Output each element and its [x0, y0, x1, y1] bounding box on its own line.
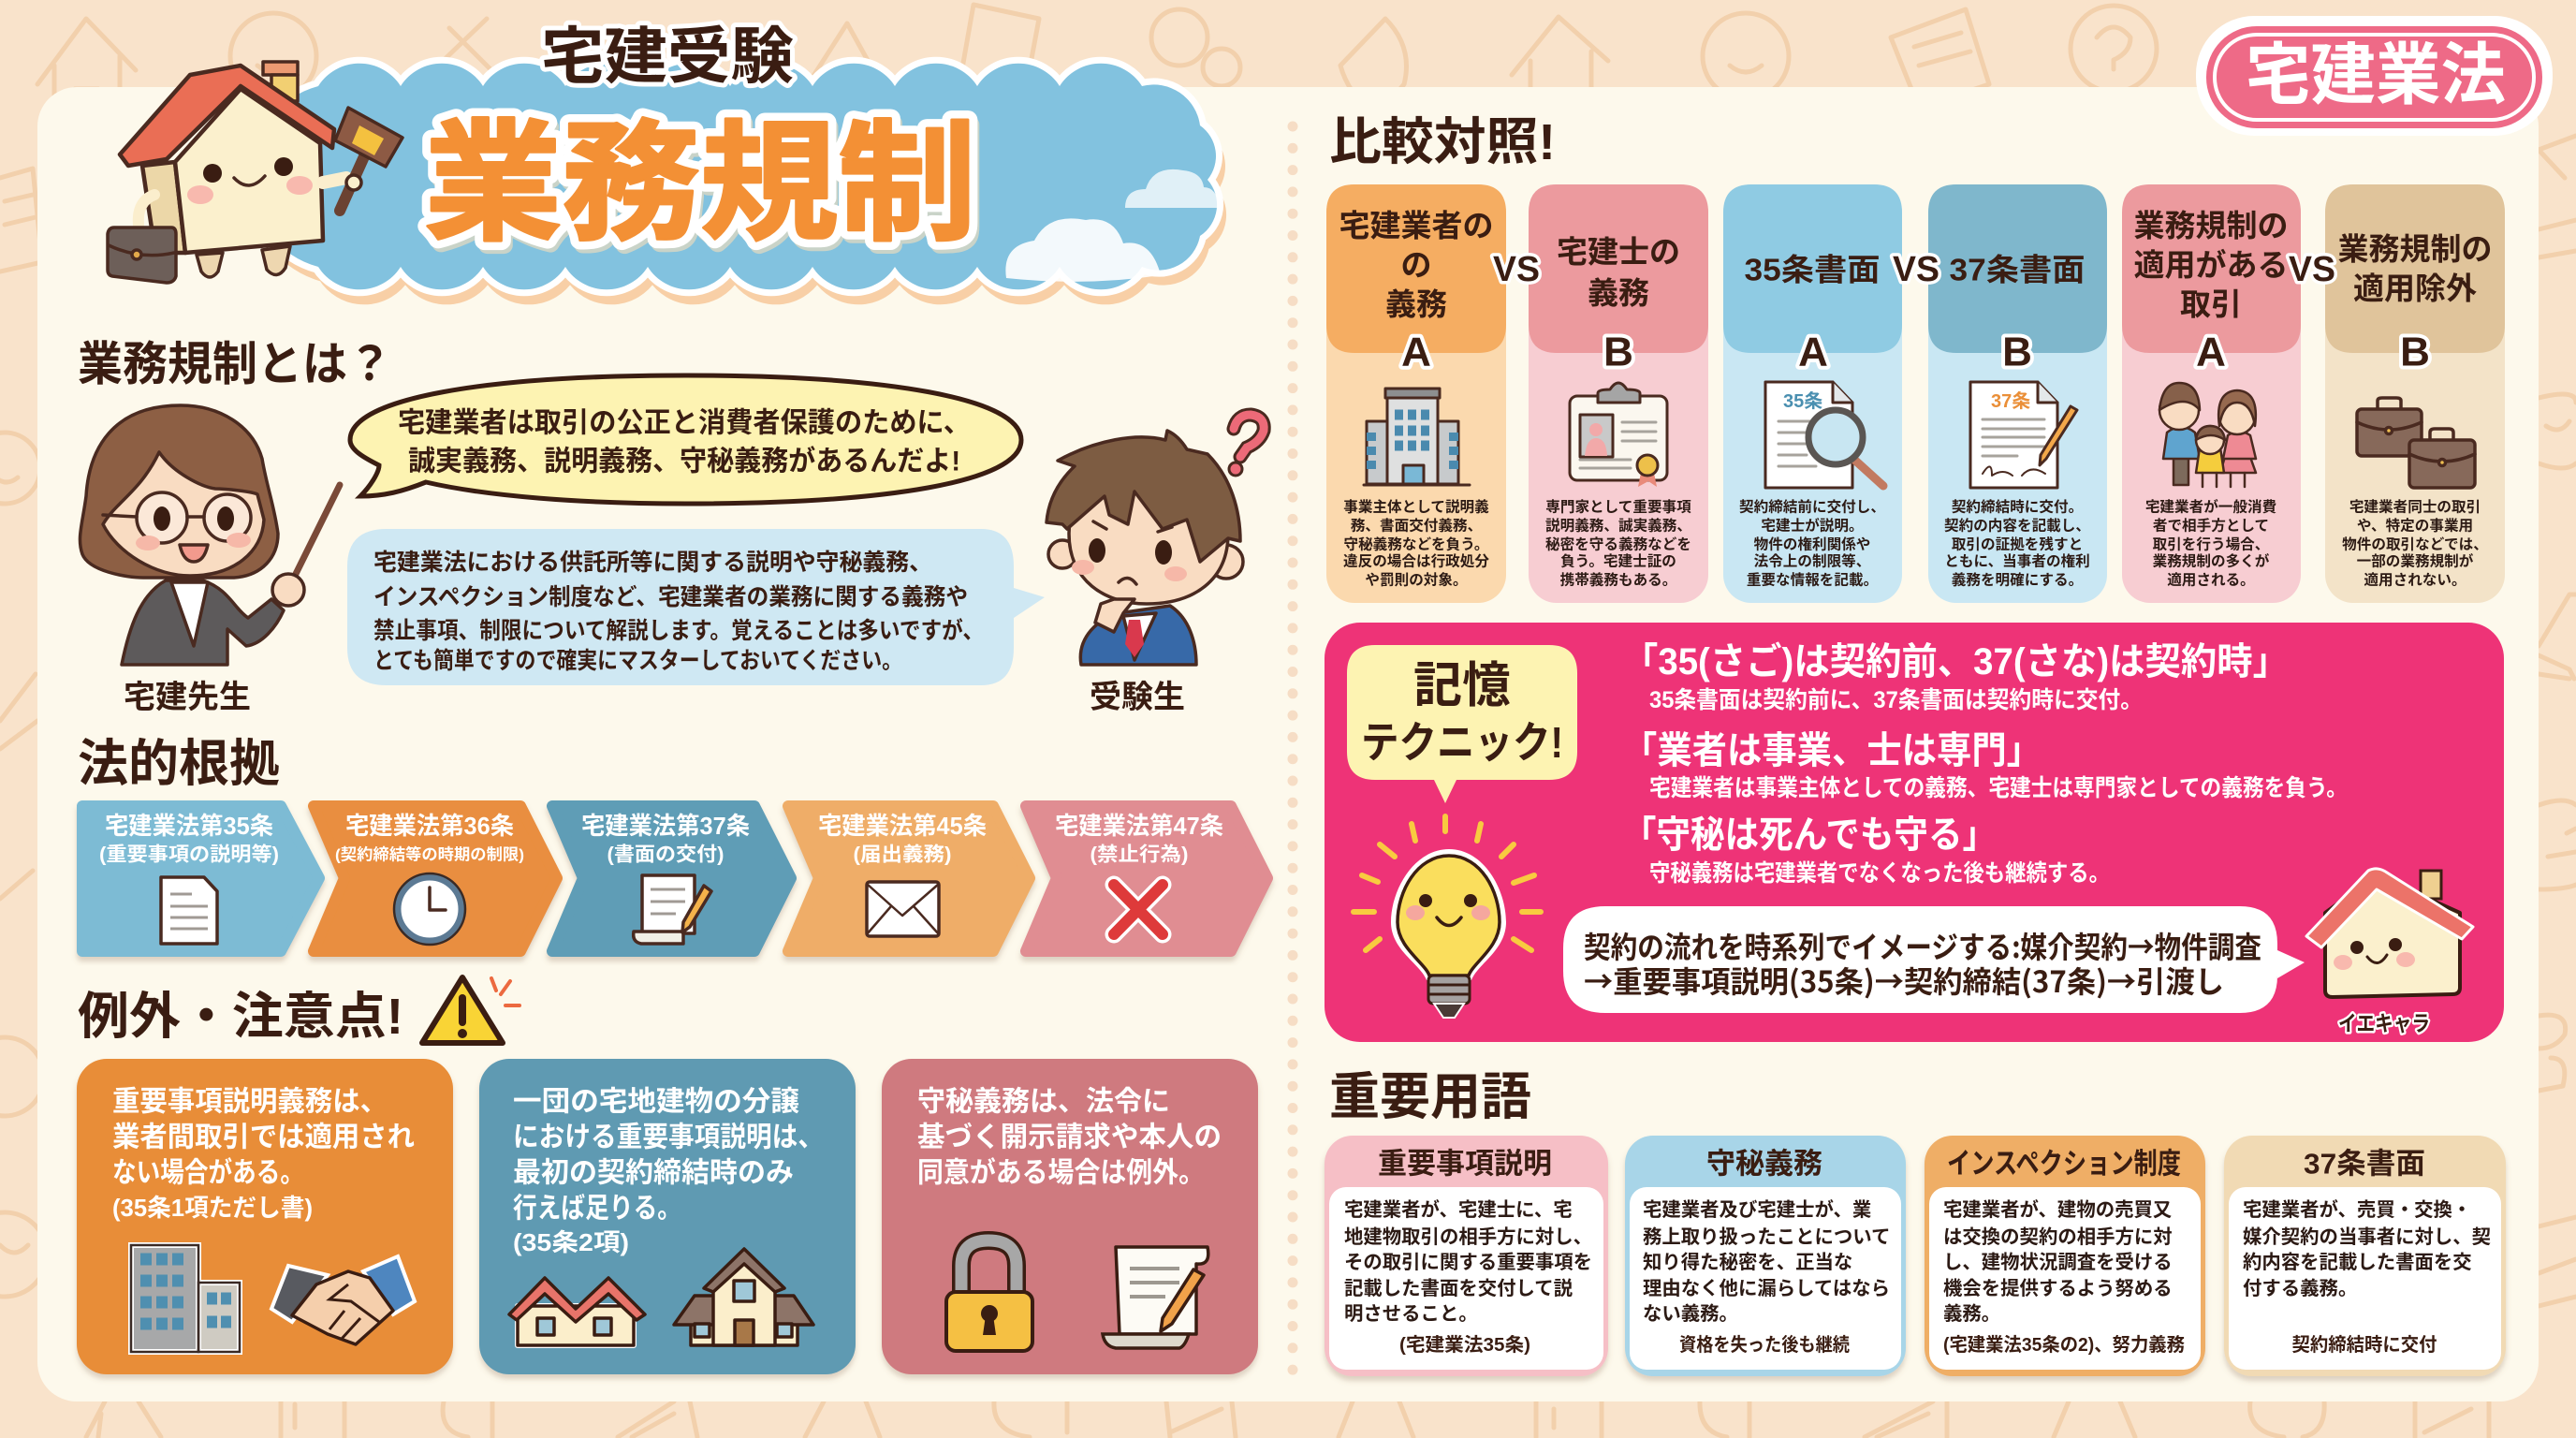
icon: license clipboard — [1570, 383, 1667, 487]
character: 受験生 student — [1046, 415, 1264, 665]
card: 重要事項説明: 地建物取引の相手方に対し、 — [1344, 1226, 1592, 1248]
icon: warning triangle — [422, 977, 520, 1043]
column: 宅建業者の義務 — [1326, 184, 1506, 603]
speech bubble: yellow — [350, 375, 1021, 504]
icon: two briefcases — [2357, 398, 2475, 488]
legal basis chevrons — [82, 806, 1267, 951]
heading: 法的根拠: 法的根拠 — [78, 736, 280, 792]
column: 適用除外: B — [2400, 330, 2430, 374]
column: 宅建業者の義務: 義務 — [1385, 286, 1447, 322]
chevron: 第47条: 宅建業法第47条 — [1055, 812, 1223, 840]
chevron: 第45条: (届出義務) — [854, 844, 951, 865]
callout: 記憶テクニック!: テクニック! — [1361, 718, 1563, 767]
panel: 記憶テクニック — [1325, 623, 2504, 1042]
text block — [1343, 498, 1489, 588]
text block: 義務を明確にする。 — [1952, 571, 2083, 588]
text block: 負う。宅建士証の — [1560, 552, 1676, 569]
chevron: 第36条 — [314, 806, 557, 951]
exception card: 守秘義務: 守秘義務は、法令に — [917, 1086, 1170, 1118]
card: インスペクション制度: 宅建業者が、建物の売買又 — [1943, 1198, 2172, 1221]
text block — [2145, 498, 2276, 588]
column: 適用がある取引: 適用がある — [2134, 247, 2288, 283]
chevron: 第47条 — [1026, 806, 1267, 951]
exception card: 一団の分譲: (35条2項) — [513, 1228, 629, 1256]
text block: 適用されない。 — [2364, 571, 2466, 588]
column: 適用除外: 適用除外 — [2353, 271, 2477, 305]
column: 宅建士の義務: 義務 — [1588, 275, 1649, 311]
tip 3: 守秘義務は宅建業者でなくなった後も継続する。 — [1649, 860, 2110, 887]
VS badge 2: VS — [1893, 250, 1939, 289]
icon: document with pen — [1970, 382, 2077, 488]
card: 重要事項説明: 宅建業者が、宅建士に、宅 — [1344, 1198, 1573, 1221]
card: 守秘義務: 資格を失った後も継続 — [1679, 1334, 1850, 1356]
card: 重要事項説明: 重要事項説明 — [1378, 1148, 1552, 1180]
text block: 秘密を守る義務などを — [1545, 536, 1691, 552]
icon: handshake — [271, 1256, 415, 1344]
card: 37条書面: 契約締結時に交付 — [2291, 1334, 2437, 1356]
main title: 業務規制: 業務規制 — [427, 114, 979, 262]
column: 35条書面: A — [1798, 330, 1828, 374]
card: 守秘義務: ない義務。 — [1643, 1303, 1738, 1325]
column: 適用がある取引: 取引 — [2180, 286, 2242, 322]
label: 受験生: 受験生 — [1090, 680, 1185, 715]
chevron: 第35条: 宅建業法第35条 — [105, 812, 273, 840]
icon: large house — [674, 1249, 813, 1345]
text block: 適用される。 — [2167, 571, 2255, 588]
cloud banner shape — [249, 64, 1222, 300]
card: インスペクション制度 — [1925, 1136, 2205, 1376]
card: 37条書面: 約内容を記載した書面を交 — [2243, 1252, 2472, 1273]
exception card: 守秘義務 — [882, 1059, 1258, 1374]
text block: 契約締結時に交付。 — [1952, 498, 2083, 515]
title banner — [249, 22, 1222, 300]
speech bubble: yellow: 宅建業者は取引の公正と消費者保護のために、 — [398, 408, 971, 438]
main title: 業務規制: 業務規制 — [424, 110, 976, 257]
exception card: 重要事項説明義務: 業者間取引では適用され — [112, 1122, 415, 1153]
icon: small house mascot — [2306, 869, 2473, 997]
chevron: 第45条 — [788, 806, 1030, 951]
tip 3 — [1622, 814, 2110, 887]
chevron: 第36条: 宅建業法第36条 — [345, 812, 514, 840]
text block: 説明義務、誠実義務、 — [1545, 517, 1691, 534]
card: 重要事項説明 — [1325, 1136, 1608, 1376]
text block: や罰則の対象。 — [1365, 571, 1468, 588]
icon: document with pen: 37条 — [1991, 390, 2030, 412]
heading: 例外・注意点!: 例外・注意点! — [78, 989, 403, 1045]
icon: contract with pen — [1103, 1247, 1208, 1348]
tip 1: 35条書面は契約前に、37条書面は契約時に交付。 — [1649, 687, 2143, 713]
character: 宅建先生 teacher — [80, 405, 340, 665]
card: 37条書面: 宅建業者が、売買・交換・ — [2243, 1198, 2471, 1221]
text block: ともに、当事者の権利 — [1944, 552, 2090, 569]
speech bubble: contract flow — [1563, 906, 2305, 1013]
icon: building — [1364, 389, 1470, 485]
text block: 業務規制の多くが — [2153, 552, 2270, 569]
exception card: 一団の分譲: における重要事項説明は、 — [513, 1122, 824, 1153]
tip 2: 宅建業者は事業主体としての義務、宅建士は専門家としての義務を負う。 — [1649, 775, 2348, 801]
card: 守秘義務 — [1625, 1136, 1906, 1376]
label: 宅建先生: 宅建先生 — [124, 680, 251, 715]
column: 適用除外: 業務規制の — [2338, 232, 2492, 266]
chevron: 第37条: 宅建業法第37条 — [581, 812, 750, 840]
tip 2: 「業者は事業、士は専門」 — [1622, 730, 2042, 771]
column: 宅建士の義務 — [1529, 184, 1708, 603]
icon: house mascot with gavel and briefcase — [108, 62, 402, 283]
speech bubble: contract flow: 契約の流れを時系列でイメージする:媒介契約→物件調査 — [1584, 924, 2261, 967]
callout: 記憶テクニック!: 記憶 — [1413, 659, 1511, 713]
card: インスペクション制度: し、建物状況調査を受ける — [1943, 1252, 2173, 1273]
speech bubble: explanation: 禁止事項、制限について解説します。覚えることは多いですが、 — [373, 617, 984, 644]
column: 適用除外 — [2325, 184, 2505, 603]
text block: 宅建士が説明。 — [1761, 517, 1864, 534]
icon: family — [2159, 383, 2256, 487]
card: 重要事項説明: その取引に関する重要事項を — [1344, 1252, 1592, 1273]
chevron: 第37条: (書面の交付) — [607, 844, 724, 865]
column: 宅建業者の義務: A — [1401, 330, 1431, 374]
text block: 宅建業者が一般消費 — [2145, 498, 2276, 515]
text block: 守秘義務などを負う。 — [1343, 536, 1489, 552]
text block: 物件の権利関係や — [1754, 536, 1870, 552]
chevron: 第37条 — [552, 806, 791, 951]
exception card: 重要事項説明義務: ない場合がある。 — [112, 1157, 304, 1189]
column: 宅建士の義務: B — [1603, 330, 1633, 374]
text block: 契約締結前に交付し、 — [1739, 498, 1885, 515]
text block: 取引を行う場合、 — [2153, 536, 2269, 552]
exception card: 重要事項説明義務: 重要事項説明義務は、 — [112, 1086, 388, 1118]
icon: document with magnifier: 35条 — [1783, 390, 1822, 412]
card: 37条書面 — [2224, 1136, 2506, 1376]
badge: 宅建業法: 宅建業法 — [2246, 38, 2506, 113]
exception card: 一団の分譲: 最初の契約締結時のみ — [513, 1157, 794, 1189]
text block: 物件の取引などでは、 — [2342, 536, 2488, 552]
exception card: 重要事項説明義務: (35条1項ただし書) — [112, 1194, 313, 1222]
card: インスペクション制度: 機会を提供するよう努める — [1943, 1278, 2173, 1299]
heading: 業務規制とは？: 業務規制とは？ — [78, 338, 392, 390]
speech bubble: explanation: インスペクション制度など、宅建業者の業務に関する義務や — [373, 584, 968, 610]
badge: 宅建業法 — [2196, 16, 2553, 136]
column: 宅建士の義務: 宅建士の — [1557, 234, 1680, 270]
exception card: 一団の分譲 — [479, 1059, 856, 1374]
text block — [2342, 498, 2488, 588]
chevron: 第45条: 宅建業法第45条 — [818, 812, 987, 840]
dotted divider — [1288, 126, 1297, 1376]
card: 守秘義務: 務上取り扱ったことについて — [1643, 1226, 1890, 1248]
text block — [1545, 498, 1691, 588]
text block: 一部の業務規制が — [2357, 552, 2474, 569]
card: 重要事項説明: (宅建業法35条) — [1399, 1334, 1530, 1356]
column: 35条書面 — [1723, 184, 1902, 603]
chevron: 第35条: (重要事項の説明等) — [99, 843, 279, 865]
column: 宅建業者の義務: の — [1400, 247, 1432, 283]
icon: two small houses — [509, 1278, 645, 1345]
card: 守秘義務: 理由なく他に漏らしてはなら — [1643, 1278, 1890, 1299]
card: 重要事項説明: 明させること。 — [1344, 1303, 1478, 1325]
column: 適用がある取引: A — [2196, 330, 2226, 374]
text block: 取引の証拠を残すと — [1952, 536, 2083, 552]
column: 37条書面 — [1928, 184, 2107, 603]
tip 1: 「35(さご)は契約前、37(さな)は契約時」 — [1622, 641, 2289, 682]
heading: 比較対照!: 比較対照! — [1329, 114, 1556, 170]
callout: 記憶テクニック! — [1347, 645, 1577, 803]
exception card: 守秘義務: 基づく開示請求や本人の — [917, 1122, 1222, 1153]
text block: 違反の場合は行政処分 — [1343, 552, 1489, 569]
card: 守秘義務: 宅建業者及び宅建士が、業 — [1643, 1198, 1871, 1221]
text block — [1739, 498, 1885, 588]
tip 3: 「守秘は死んでも守る」 — [1622, 814, 1997, 856]
exception card: 一団の分譲: 行えば足りる。 — [513, 1193, 681, 1225]
tip 1 — [1622, 641, 2289, 713]
icon: document with magnifier — [1765, 382, 1883, 488]
speech bubble: explanation: 宅建業法における供託所等に関する説明や守秘義務、 — [373, 550, 932, 576]
text block: 宅建業者同士の取引 — [2349, 498, 2481, 515]
card: 37条書面: 媒介契約の当事者に対し、契 — [2243, 1226, 2491, 1248]
column: 37条書面: B — [2002, 330, 2032, 374]
heading: 重要用語: 重要用語 — [1329, 1069, 1531, 1125]
card: インスペクション制度: (宅建業法35条の2)、努力義務 — [1943, 1334, 2185, 1356]
chevron: 第35条 — [82, 806, 319, 951]
column: 35条書面: 35条書面 — [1745, 253, 1880, 286]
exception card: 守秘義務: 同意がある場合は例外。 — [917, 1157, 1205, 1189]
VS badge 3: VS — [2289, 250, 2335, 289]
text block: 重要な情報を記載。 — [1747, 571, 1878, 588]
text block: 事業主体として説明義 — [1343, 498, 1489, 515]
card: インスペクション制度: は交換の契約の相手方に対 — [1943, 1226, 2173, 1248]
speech bubble: explanation: とても簡単ですので確実にマスターしておいてください。 — [373, 648, 902, 674]
speech bubble: yellow: 誠実義務、説明義務、守秘義務があるんだよ! — [408, 446, 960, 477]
tip 2 — [1622, 730, 2348, 801]
main title: 業務規制: 業務規制 — [424, 110, 976, 257]
speech bubble: explanation — [347, 529, 1045, 685]
icon: office building — [131, 1245, 240, 1352]
subtitle: 宅建受験: 宅建受験 — [541, 22, 794, 91]
text block — [1944, 498, 2090, 588]
card: 37条書面: 37条書面 — [2304, 1148, 2425, 1180]
chevron: 第47条: (禁止行為) — [1090, 844, 1189, 865]
text block: 携帯義務もある。 — [1560, 571, 1676, 588]
glossary cards — [1325, 1136, 2506, 1376]
icon: light bulb mascot — [1354, 816, 1541, 1018]
chevron: 第36条: (契約締結等の時期の制限) — [335, 844, 524, 863]
speech bubble: contract flow: →重要事項説明(35条)→契約締結(37条)→引渡し — [1584, 959, 2224, 1002]
card: インスペクション制度: インスペクション制度 — [1947, 1148, 2181, 1180]
column: 37条書面: 37条書面 — [1949, 253, 2086, 286]
card: 37条書面: 付する義務。 — [2243, 1278, 2357, 1299]
text block: 専門家として重要事項 — [1545, 498, 1691, 515]
card: 守秘義務: 守秘義務 — [1706, 1148, 1822, 1180]
column: 適用がある取引 — [2122, 184, 2301, 603]
card: 守秘義務: 知り得た秘密を、正当な — [1643, 1252, 1852, 1273]
column: 宅建業者の義務: 宅建業者の — [1339, 208, 1494, 243]
text block: 法令上の制限等、 — [1754, 552, 1870, 569]
column: 適用がある取引: 業務規制の — [2134, 208, 2288, 243]
comparison table — [1326, 184, 2505, 603]
exception card: 一団の分譲: 一団の宅地建物の分譲 — [513, 1086, 799, 1118]
icon: padlock — [946, 1240, 1032, 1351]
card: 重要事項説明: 記載した書面を交付して説 — [1344, 1278, 1573, 1299]
card: インスペクション制度: 義務。 — [1943, 1303, 2000, 1325]
VS badge 1: VS — [1493, 250, 1540, 289]
text block: 者で相手方として — [2153, 517, 2269, 534]
exception card: 重要事項説明義務 — [77, 1059, 453, 1374]
label: イエキャラ: イエキャラ — [2338, 1011, 2430, 1035]
text block: や、特定の事業用 — [2357, 517, 2473, 534]
text block: 務、書面交付義務、 — [1351, 517, 1482, 534]
text block: 契約の内容を記載し、 — [1944, 517, 2090, 534]
